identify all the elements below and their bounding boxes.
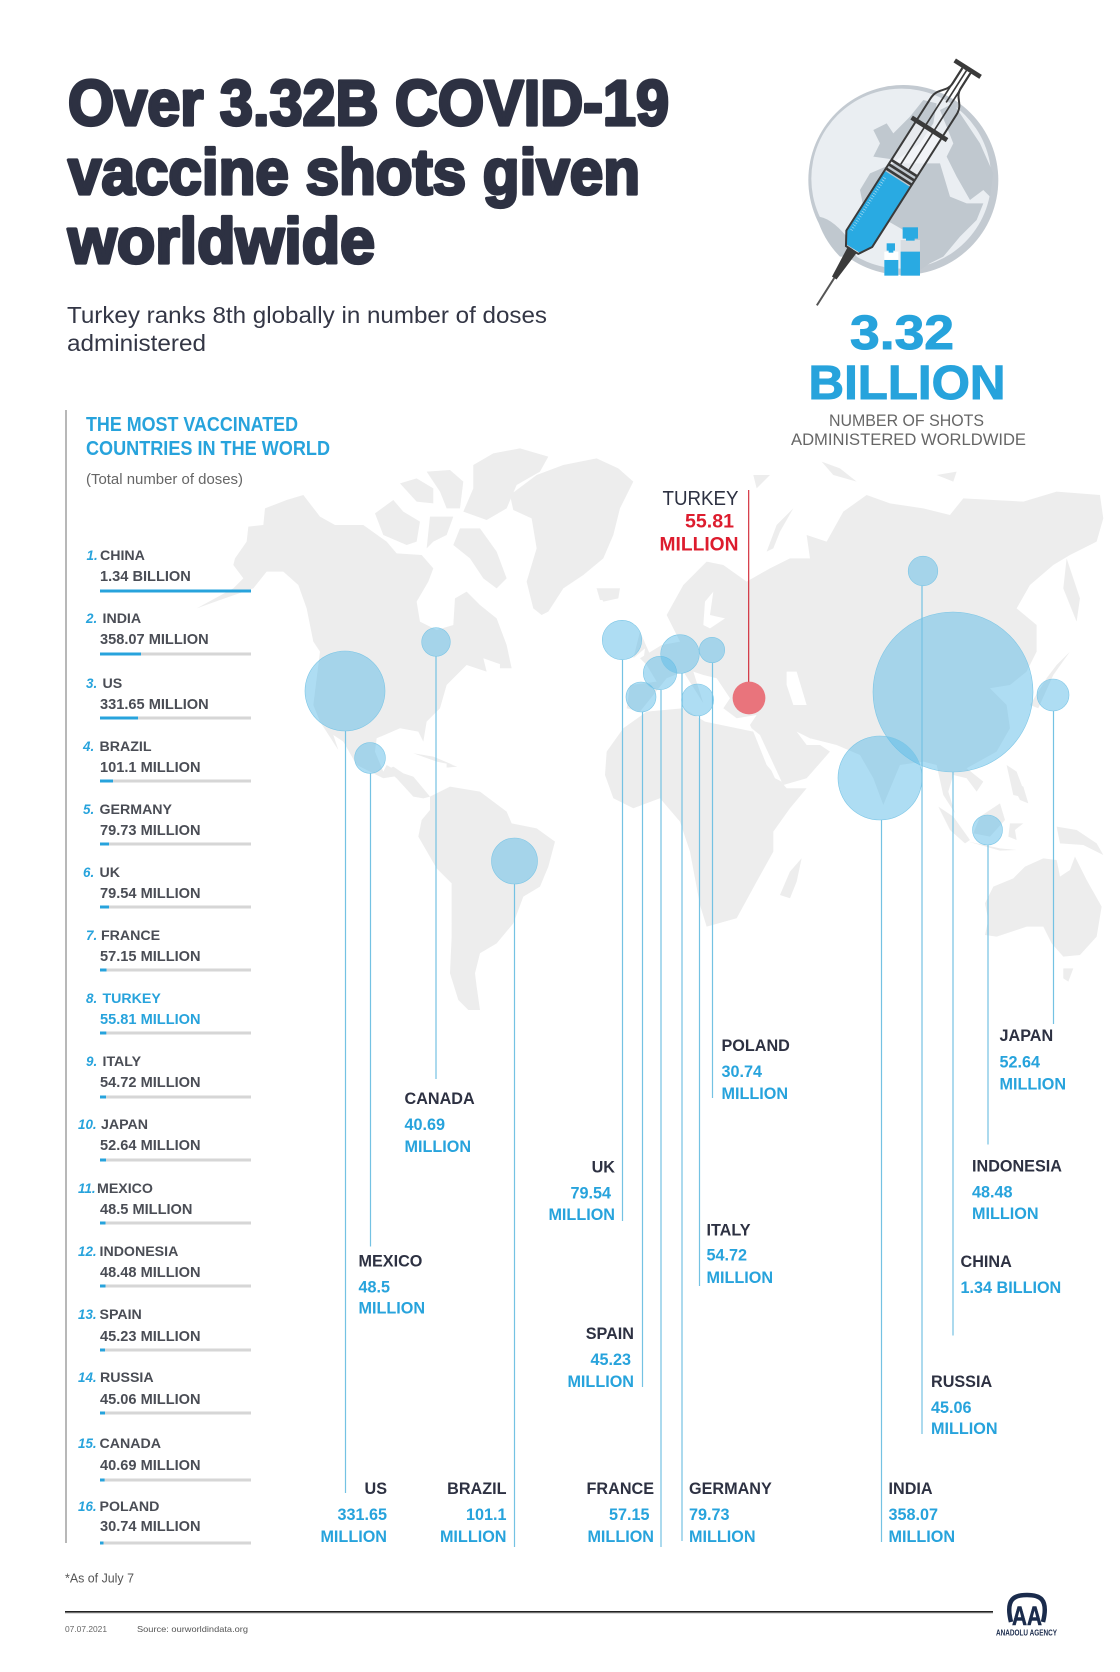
row: India: 358.07 MILLION [100, 632, 209, 648]
caption: number of shots administered worldwide [791, 411, 1026, 449]
title: vaccine shots given [68, 136, 640, 208]
row: Canada [78, 1436, 251, 1482]
footer date: 07.07.2021 [65, 1624, 107, 1634]
label: Canada: 40.69 [404, 1116, 445, 1134]
label: China: CHINA [960, 1253, 1012, 1271]
row: France: 57.15 MILLION [100, 949, 201, 965]
label: Japan [1000, 1027, 1066, 1094]
label: France: FRANCE [587, 1480, 654, 1498]
label: Poland: 30.74 [722, 1063, 762, 1081]
label: Poland: MILLION [722, 1085, 788, 1103]
row: France: 7. [86, 928, 97, 943]
label: US: MILLION [320, 1528, 387, 1546]
label: India: INDIA [888, 1480, 933, 1498]
row: Turkey [86, 991, 251, 1034]
label: Italy: 54.72 [706, 1246, 747, 1264]
subtitle: Turkey ranks 8th globally in number of doses [67, 302, 547, 328]
row: France [86, 928, 251, 972]
bubble: UK [602, 620, 642, 1221]
bubble: Indonesia [972, 815, 1002, 1144]
label: Poland [722, 1037, 790, 1103]
row: Indonesia [78, 1244, 251, 1288]
row: Mexico: 11. [78, 1181, 96, 1196]
label: Germany: GERMANY [689, 1480, 772, 1498]
bubble: Japan [1037, 679, 1069, 1024]
callout: Turkey: MILLION [660, 534, 738, 556]
row: Poland [78, 1499, 251, 1544]
panel: ranking list [66, 410, 330, 1544]
vials [884, 227, 920, 276]
row: Russia [78, 1370, 251, 1414]
row: Poland: POLAND [100, 1499, 159, 1515]
row: France: FRANCE [101, 928, 160, 944]
bubble: Italy [682, 684, 714, 1286]
label: Japan: JAPAN [1000, 1027, 1053, 1045]
label: Brazil: BRAZIL [447, 1480, 507, 1498]
bubble: US [305, 651, 385, 1493]
row: Turkey: 55.81 MILLION [100, 1012, 201, 1028]
row: Indonesia: 48.48 MILLION [100, 1265, 201, 1281]
label: India: MILLION [888, 1528, 955, 1546]
row: Japan: 52.64 MILLION [100, 1138, 201, 1154]
label: Canada: MILLION [404, 1138, 471, 1156]
label: Italy [706, 1222, 773, 1287]
callout: Turkey [660, 488, 738, 556]
logo: Anadolu Agency: ANADOLU AGENCY [996, 1628, 1058, 1638]
syringe [799, 55, 987, 317]
ranking heading: THE MOST VACCINATED [86, 414, 298, 436]
label: Poland: POLAND [722, 1037, 790, 1055]
title [67, 67, 669, 277]
row: China [86, 548, 251, 592]
label: Mexico: MILLION [358, 1300, 425, 1318]
row: Spain [78, 1307, 251, 1352]
row: Italy [86, 1054, 251, 1098]
label: Canada [404, 1090, 475, 1156]
row: Brazil: 101.1 MILLION [100, 760, 201, 776]
label: Brazil: MILLION [440, 1528, 506, 1546]
logo: Anadolu Agency [996, 1595, 1058, 1638]
icon: globe with syringe and vials [799, 55, 998, 317]
row: Indonesia: 12. [78, 1244, 97, 1259]
row: Italy: 9. [86, 1054, 97, 1069]
bubble: Canada [422, 628, 450, 1079]
label: Germany [689, 1480, 772, 1546]
ranking heading [86, 414, 330, 460]
row: US: 3. [86, 676, 97, 691]
row: Spain: 45.23 MILLION [100, 1329, 201, 1345]
row: Japan: 10. [78, 1117, 97, 1132]
label: France [587, 1480, 654, 1546]
callout: Turkey: TURKEY [662, 488, 738, 510]
label: UK: 79.54 [570, 1184, 611, 1202]
bubble: Turkey [733, 490, 765, 714]
label: Indonesia: MILLION [972, 1205, 1039, 1223]
row: Canada: CANADA [100, 1436, 161, 1452]
label: China [960, 1253, 1061, 1297]
row: China: 1.34 BILLION [100, 569, 191, 585]
bubble: China [873, 612, 1033, 1336]
label: Japan: 52.64 [1000, 1054, 1040, 1072]
row: US: 331.65 MILLION [100, 697, 209, 713]
row: Brazil [82, 739, 251, 782]
row: China: CHINA [100, 548, 145, 564]
label: Spain: MILLION [567, 1373, 634, 1391]
label: Mexico: MEXICO [358, 1252, 422, 1270]
row: Japan [78, 1117, 251, 1162]
footnote: *As of July 7 [65, 1572, 134, 1586]
subtitle [67, 302, 547, 356]
label: UK: UK [592, 1158, 615, 1176]
bubble: Russia [908, 556, 938, 1434]
row: Canada: 15. [78, 1436, 97, 1451]
row: Spain: SPAIN [100, 1307, 142, 1323]
row: Russia: 14. [78, 1370, 97, 1385]
row: Mexico: 48.5 MILLION [100, 1202, 192, 1218]
row: Russia: RUSSIA [100, 1370, 154, 1386]
label: Japan: MILLION [1000, 1076, 1066, 1094]
row: Turkey: TURKEY [102, 991, 161, 1007]
label: Germany: 79.73 [689, 1506, 730, 1524]
footer rule [65, 1611, 993, 1614]
row: Mexico: MEXICO [97, 1181, 153, 1197]
row: Brazil: 4. [82, 739, 94, 754]
label: Russia: MILLION [931, 1420, 998, 1438]
bubble: Poland [699, 637, 725, 1098]
label: Indonesia [972, 1158, 1062, 1223]
row: India [85, 611, 251, 656]
label: UK: MILLION [548, 1206, 615, 1224]
row: Spain: 13. [78, 1307, 97, 1322]
label: Indonesia: 48.48 [972, 1184, 1013, 1202]
row: Germany: GERMANY [100, 802, 173, 818]
row: US: US [102, 676, 122, 692]
label: Russia: 45.06 [931, 1399, 972, 1417]
label: Spain [567, 1325, 634, 1391]
row: Mexico [78, 1181, 251, 1224]
bubble: Spain [626, 682, 656, 1387]
label: France: 57.15 [609, 1506, 650, 1524]
row: India: INDIA [102, 611, 141, 627]
label: Spain: 45.23 [590, 1351, 631, 1369]
label: Brazil: 101.1 [466, 1506, 506, 1524]
bubble: India [838, 736, 922, 1542]
label: US: US [364, 1480, 387, 1498]
label: China: 1.34 BILLION [960, 1279, 1061, 1297]
row: Russia: 45.06 MILLION [100, 1392, 201, 1408]
row: Germany [83, 802, 251, 846]
caption: number of shots administered worldwide: NUMBER OF SHOTS [829, 411, 984, 430]
logo: Anadolu Agency: AA [1012, 1601, 1042, 1631]
bubble: Brazil [492, 838, 538, 1547]
label: Russia: RUSSIA [931, 1373, 992, 1391]
row: Indonesia: INDONESIA [100, 1244, 178, 1260]
label: Russia [931, 1373, 998, 1438]
row: China: 1. [86, 548, 98, 563]
ranking subheading: (Total number of doses) [86, 472, 243, 488]
row: Poland: 16. [78, 1499, 97, 1514]
big number: 3.32 billion: 3.32 [850, 307, 954, 360]
bubble: Mexico [355, 743, 385, 1246]
big number: 3.32 billion: BILLION [808, 357, 1006, 410]
footer source: Source: ourworldindata.org [137, 1624, 248, 1634]
label: US [320, 1480, 387, 1546]
row: Germany: 5. [83, 802, 94, 817]
caption: number of shots administered worldwide: ADMINISTERED WORLDWIDE [791, 430, 1026, 449]
label: US: 331.65 [337, 1506, 387, 1524]
row: Brazil: BRAZIL [100, 739, 152, 755]
label: India: 358.07 [888, 1506, 938, 1524]
ranking heading: COUNTRIES IN THE WORLD [86, 438, 330, 460]
world map [197, 448, 1103, 1010]
big number: 3.32 billion [808, 307, 1006, 410]
subtitle: administered [67, 330, 206, 356]
row: Germany: 79.73 MILLION [100, 823, 201, 839]
label: Brazil [440, 1480, 507, 1546]
row: Italy: ITALY [102, 1054, 142, 1070]
title: Over 3.32B COVID-19 [68, 67, 669, 139]
label: France: MILLION [587, 1528, 654, 1546]
row: UK: UK [100, 865, 121, 881]
label: UK [548, 1158, 615, 1224]
label: Canada: CANADA [404, 1090, 475, 1108]
row: UK: 79.54 MILLION [100, 886, 201, 902]
row: India: 2. [85, 611, 97, 626]
row: Turkey: 8. [86, 991, 97, 1006]
label: Mexico [358, 1252, 425, 1318]
bubble: France [643, 656, 677, 1547]
title: worldwide [67, 205, 375, 277]
row: UK [83, 865, 251, 908]
callout: Turkey: 55.81 [685, 510, 734, 532]
label: Italy: ITALY [706, 1222, 751, 1240]
label: India [888, 1480, 955, 1546]
label: Germany: MILLION [689, 1528, 756, 1546]
row: US [86, 676, 251, 720]
label: Indonesia: INDONESIA [972, 1158, 1062, 1176]
label: Mexico: 48.5 [358, 1278, 390, 1296]
row: Canada: 40.69 MILLION [100, 1458, 201, 1474]
label: Italy: MILLION [706, 1269, 773, 1287]
bubble: Germany [661, 635, 699, 1541]
globe [808, 85, 998, 275]
label: Spain: SPAIN [586, 1325, 634, 1343]
row: Poland: 30.74 MILLION [100, 1519, 201, 1535]
row: UK: 6. [83, 865, 94, 880]
row: Japan: JAPAN [101, 1117, 148, 1133]
row: Italy: 54.72 MILLION [100, 1075, 201, 1091]
